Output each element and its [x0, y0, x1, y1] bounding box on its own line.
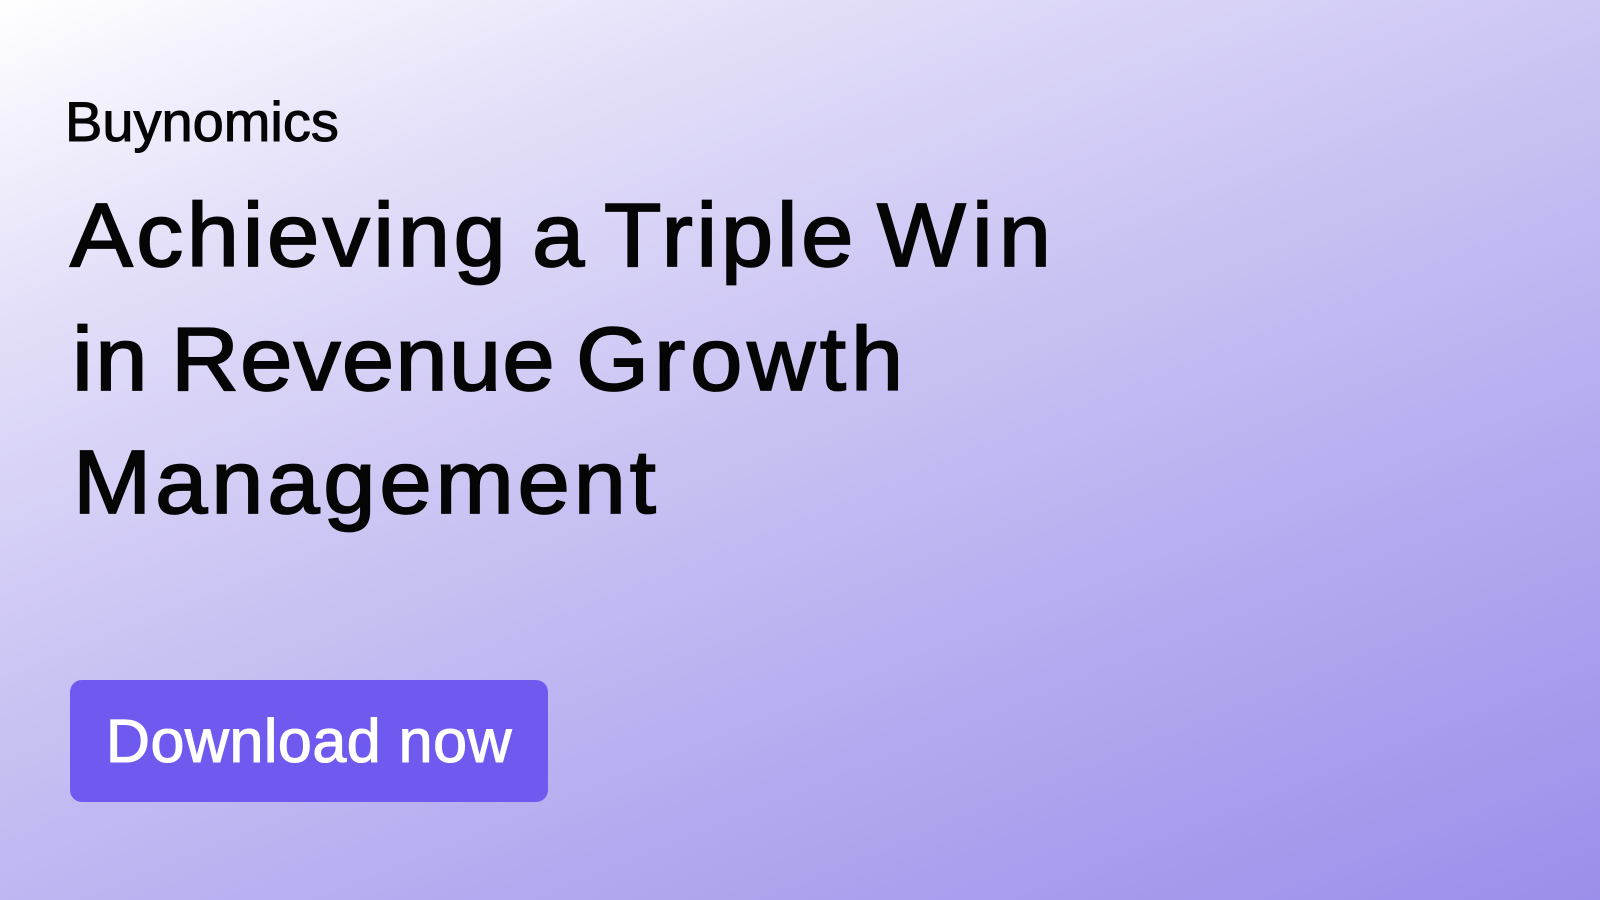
- button: download now: [70, 680, 548, 802]
- title: Achieving: [70, 186, 509, 286]
- title: [68, 186, 1057, 533]
- logo: Buynomics wordmark: Buynomics: [65, 90, 339, 153]
- title: Management: [73, 433, 660, 533]
- title: Win: [877, 186, 1057, 286]
- title: Growth: [576, 310, 908, 410]
- title: Revenue: [171, 310, 556, 410]
- button: download now: Download now: [106, 707, 512, 775]
- title: in: [72, 310, 150, 410]
- title: Triple: [604, 186, 857, 286]
- title: a: [532, 186, 586, 286]
